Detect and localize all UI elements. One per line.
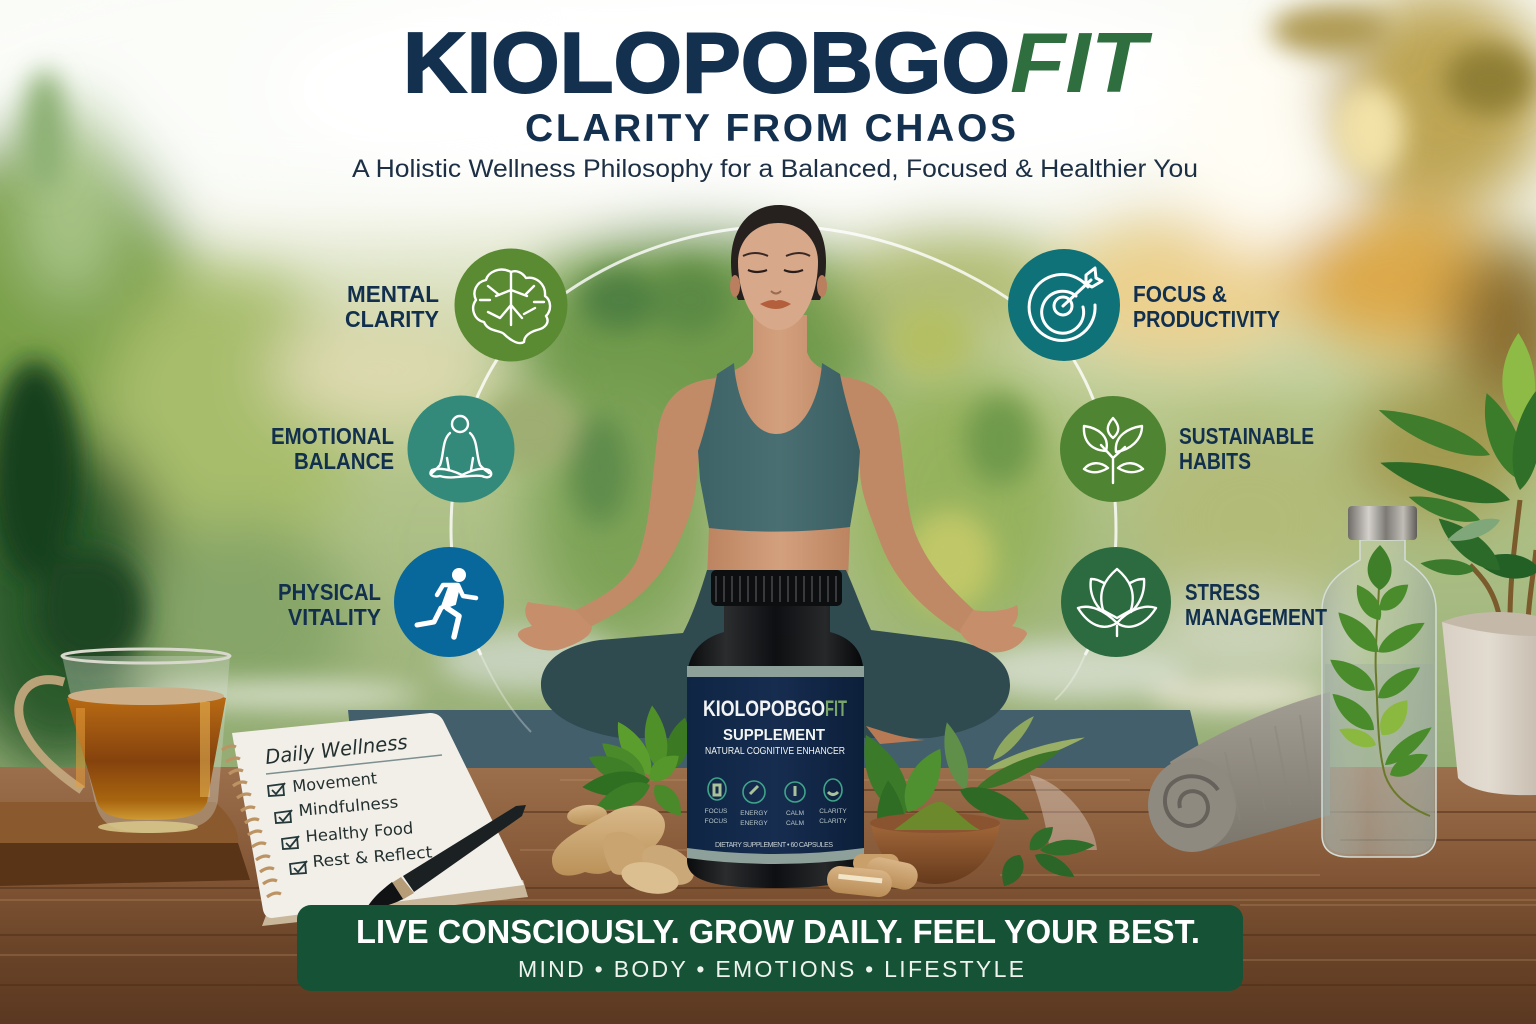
tea tray bbox=[0, 802, 250, 886]
pillar: sustainable habits: HABITS bbox=[1179, 448, 1251, 474]
pillar: emotional balance: BALANCE bbox=[294, 448, 394, 474]
jar text: FOCUS bbox=[705, 808, 728, 815]
water bottle bbox=[1322, 506, 1436, 857]
icon: brain bbox=[473, 270, 550, 343]
plant pot bbox=[1442, 612, 1536, 795]
pillar: emotional balance: EMOTIONAL bbox=[271, 423, 394, 449]
notebook list: Mindfulness bbox=[298, 792, 399, 820]
supplement jar bbox=[687, 570, 864, 888]
hands bbox=[518, 602, 592, 650]
pillar: sustainable habits: SUSTAINABLE bbox=[1179, 423, 1314, 449]
banner sublabel: MIND • BODY • EMOTIONS • LIFESTYLE bbox=[518, 956, 1024, 982]
pillar: physical vitality: PHYSICAL bbox=[278, 579, 381, 605]
title: FIT bbox=[1010, 16, 1152, 111]
jar text: KIOLOPOBGO bbox=[703, 696, 825, 721]
pillar: mental clarity bbox=[345, 248, 568, 362]
pillar: stress management: MANAGEMENT bbox=[1185, 604, 1327, 630]
jar text: SUPPLEMENT bbox=[723, 727, 825, 744]
jar text: NATURAL COGNITIVE ENHANCER bbox=[705, 746, 845, 757]
jar text bbox=[703, 696, 847, 849]
connecting arc bbox=[451, 226, 1116, 732]
jar text: CLARITY bbox=[819, 818, 847, 825]
jar text: DIETARY SUPPLEMENT • 60 CAPSULES bbox=[715, 842, 833, 849]
face bbox=[730, 223, 827, 330]
title: KIOLOPOBGO bbox=[403, 16, 1010, 111]
yoga mat bbox=[348, 710, 1204, 768]
notebook list: Movement bbox=[291, 768, 378, 796]
subtitle: CLARITY FROM CHAOS bbox=[525, 107, 1016, 150]
pen bbox=[365, 805, 526, 911]
left herbs bbox=[581, 704, 695, 822]
jar text: CLARITY bbox=[819, 808, 847, 815]
banner headline: LIVE CONSCIOUSLY. GROW DAILY. FEEL YOUR BEST. bbox=[356, 913, 1200, 950]
icon: sprout bbox=[1084, 418, 1143, 483]
capsules bbox=[826, 854, 920, 898]
pillar: mental clarity: MENTAL bbox=[347, 281, 439, 307]
jar body bbox=[687, 606, 864, 888]
bottle cap bbox=[1348, 506, 1417, 540]
pillar: sustainable habits bbox=[1060, 396, 1314, 502]
torso bbox=[698, 315, 862, 580]
rolled towel bbox=[1148, 692, 1330, 852]
jar text: ENERGY bbox=[740, 810, 768, 817]
ginger root bbox=[552, 803, 701, 899]
pillar: focus and productivity: PRODUCTIVITY bbox=[1133, 306, 1280, 332]
jar text: CALM bbox=[786, 810, 804, 817]
hair bbox=[731, 205, 826, 300]
jar text: FOCUS bbox=[705, 818, 728, 825]
jar cap bbox=[711, 570, 842, 606]
pillar: emotional balance bbox=[271, 396, 514, 502]
icon: runner bbox=[417, 568, 476, 637]
sprig in bottle bbox=[1325, 545, 1436, 816]
icon: lotus bbox=[1078, 569, 1156, 636]
spiral rings bbox=[222, 746, 281, 897]
woman meditating bbox=[518, 205, 1027, 744]
wooden table bbox=[0, 767, 1536, 1024]
notebook list: Rest & Reflect bbox=[312, 842, 433, 871]
banner bbox=[297, 905, 1243, 991]
pillar: focus and productivity: FOCUS & bbox=[1133, 281, 1227, 307]
sports top bbox=[698, 363, 860, 532]
icon: target with arrow bbox=[1029, 268, 1102, 340]
right arm bbox=[840, 376, 976, 634]
jar text: ENERGY bbox=[740, 820, 768, 827]
icon: meditation bbox=[430, 416, 491, 477]
pillar: mental clarity: CLARITY bbox=[345, 306, 439, 332]
tagline: A Holistic Wellness Philosophy for a Balanced, Focused & Healthier You bbox=[352, 155, 1198, 183]
notebook list bbox=[264, 730, 433, 874]
jar text: CALM bbox=[786, 820, 804, 827]
feet bbox=[866, 726, 925, 744]
jar icons bbox=[708, 778, 842, 803]
left arm bbox=[572, 378, 716, 627]
notebook list: Healthy Food bbox=[305, 818, 414, 846]
spiral notebook bbox=[222, 713, 528, 926]
pillar: focus and productivity bbox=[1008, 249, 1280, 361]
tea mug bbox=[19, 649, 230, 833]
potted plant leaves bbox=[1374, 333, 1536, 620]
jar text: FIT bbox=[825, 696, 847, 721]
legs bbox=[541, 570, 1010, 738]
pillar: physical vitality bbox=[278, 547, 504, 657]
wooden bowl of green powder bbox=[870, 802, 1000, 884]
notebook list: Daily Wellness bbox=[264, 730, 409, 769]
right herbs bbox=[851, 712, 1097, 891]
jar label bbox=[687, 672, 864, 856]
pillar: stress management: STRESS bbox=[1185, 579, 1260, 605]
pillar: stress management bbox=[1061, 547, 1327, 657]
pillar: physical vitality: VITALITY bbox=[288, 604, 381, 630]
